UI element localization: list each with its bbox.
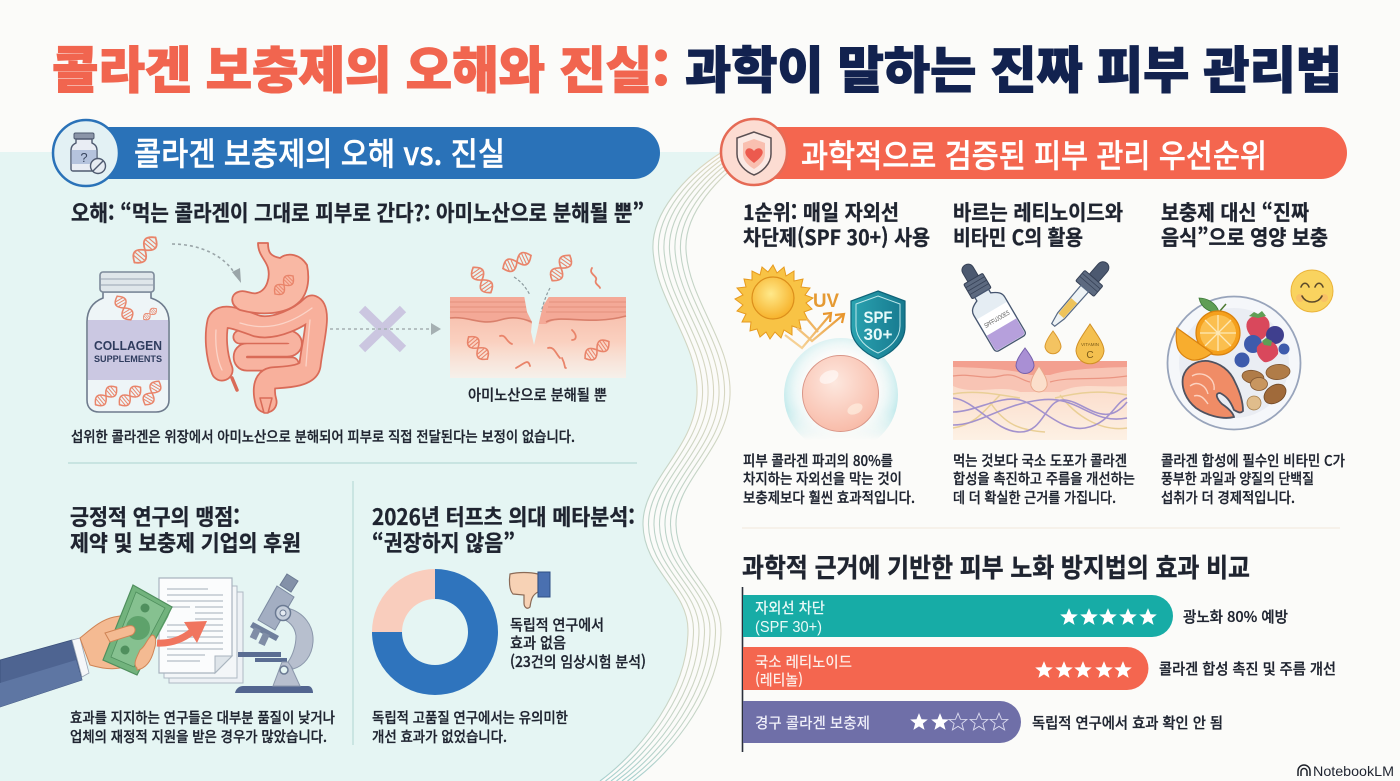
myth explanation text: 섭위한 콜라겐은 위장에서 아미노산으로 분해되어 피부로 직접 전달된다는 보정이 없습니다. [71, 426, 575, 447]
meta-analysis heading [372, 500, 635, 558]
bottle label text [94, 338, 162, 365]
real food heading: 보충제 대신 “진짜 [1161, 197, 1309, 227]
column: real food [1161, 197, 1345, 508]
rating: two of five stars [910, 713, 1008, 730]
funding bias heading [70, 500, 301, 558]
sunscreen explanation: 차지하는 자외선을 막는 것이 [743, 468, 902, 489]
bar: oral collagen [743, 701, 1021, 743]
bar label: sunscreen: (SPF 30+) [755, 619, 822, 636]
retinoid explanation: 합성을 촉진하고 주름을 개선하는 [953, 468, 1135, 489]
icon: supplement bottle with question mark: ? [80, 150, 88, 165]
illustration: serum droppers over skin layers: SPFFUJOOES [983, 309, 1011, 330]
no-effect label: 독립적 연구에서 [510, 614, 604, 635]
sunscreen heading: 차단제(SPF 30+) 사용 [743, 222, 930, 252]
left section header text: 콜라겐 보충제의 오해 vs. 진실 [134, 129, 505, 175]
left section header [53, 120, 660, 186]
illustration: stomach and intestines [216, 243, 316, 413]
rating: five stars [1035, 661, 1132, 678]
meta-analysis heading: “권장하지 않음” [372, 526, 515, 558]
meta-analysis explanation: 독립적 고품질 연구에서는 유의미한 [372, 707, 568, 728]
sunscreen heading [743, 197, 930, 252]
bar: sunscreen [743, 595, 1173, 637]
bar label: retinoid [755, 651, 852, 690]
retinoid explanation [953, 450, 1135, 508]
bar label: oral collagen: 경구 콜라겐 보충제 [755, 712, 870, 733]
illustration: collagen bottle [87, 233, 169, 412]
NotebookLM badge: NotebookLM [1313, 763, 1394, 779]
column: retinoid and vitamin C [949, 197, 1135, 508]
icon: smiling face [1291, 270, 1333, 312]
bar label: retinoid: (레티놀) [755, 669, 803, 690]
bar label: sunscreen [755, 597, 825, 636]
illustration: hand holding money [0, 585, 172, 707]
microscope [235, 686, 313, 693]
illustration: sun, UV and SPF shield [735, 265, 905, 452]
result: oral collagen: 독립적 연구에서 효과 확인 안 됨 [1032, 712, 1223, 733]
no-effect label: (23건의 임상시험 분석) [510, 651, 646, 672]
illustration: serum droppers over skin layers: VITAMIN [1081, 342, 1099, 347]
comparison chart [742, 548, 1336, 752]
panel: science-backed priorities (right) [721, 119, 1347, 752]
sunscreen explanation: 보충제보다 훨씬 효과적입니다. [743, 487, 915, 508]
retinoid explanation: 먹는 것보다 국소 도포가 콜라겐 [953, 450, 1127, 471]
no-effect label [510, 614, 646, 672]
funding bias heading: 긍정적 연구의 맹점: [70, 500, 240, 532]
real food heading [1161, 197, 1328, 252]
right section header [721, 119, 1347, 185]
cross mark and blocked arrow [330, 309, 441, 349]
title [52, 31, 1342, 103]
meta-analysis explanation: 개선 효과가 없었습니다. [372, 726, 507, 747]
icon: thumbs down [509, 572, 550, 608]
myth heading: 오해: “먹는 콜라겐이 그대로 피부로 간다?: 아미노산으로 분해될 뿐” [71, 196, 644, 228]
real food explanation [1161, 450, 1345, 508]
illustration: skin cross-section with amino acids [450, 250, 626, 378]
no-effect label: 효과 없음 [510, 632, 566, 653]
bar label: sunscreen: 자외선 차단 [755, 597, 825, 618]
sunscreen explanation: 피부 콜라겐 파괴의 80%를 [743, 450, 893, 471]
real food heading: 음식”으로 영양 보충 [1161, 222, 1328, 252]
result: sunscreen: 광노화 80% 예방 [1183, 606, 1288, 627]
real food explanation: 섭취가 더 경제적입니다. [1161, 487, 1295, 508]
real food explanation: 콜라겐 합성에 필수인 비타민 C가 [1161, 450, 1345, 471]
funding bias explanation [70, 707, 335, 747]
illustration: serum droppers over skin layers: C [1086, 350, 1094, 361]
illustration: papers and microscope [157, 574, 313, 693]
result: retinoid: 콜라겐 합성 촉진 및 주름 개선 [1159, 658, 1336, 679]
funding bias explanation: 업체의 재정적 지원을 받은 경우가 많았습니다. [70, 726, 327, 747]
illustration: sun, UV and SPF shield: SPF [864, 308, 892, 327]
title: 과학이 말하는 진짜 피부 관리법 [685, 31, 1342, 103]
donut chart: 75% no effect [372, 569, 498, 695]
panel: myth vs truth (left) [0, 120, 660, 747]
background: left teal panel [0, 152, 722, 781]
caption: broken into amino acids: 아미노산으로 분해될 뿐 [468, 384, 607, 405]
illustration: sun, UV and SPF shield: UV [813, 291, 839, 312]
retinoid explanation: 데 더 확실한 근거를 가집니다. [953, 487, 1116, 508]
block: Tufts meta-analysis [372, 500, 646, 747]
retinoid heading [953, 197, 1123, 252]
illustration: serum droppers over skin layers [949, 255, 1127, 440]
meta-analysis explanation [372, 707, 568, 747]
illustration: plate of fruit, salmon and nuts [1168, 296, 1300, 430]
bottle label text: COLLAGEN [94, 338, 162, 353]
sunscreen heading: 1순위: 매일 자외선 [743, 197, 899, 227]
decorative wave band [600, 152, 755, 781]
illustration: sun, UV and SPF shield: 30+ [864, 325, 893, 344]
icon: shield with heart [737, 132, 771, 175]
column: sunscreen [735, 197, 930, 508]
bar: retinoid [743, 647, 1148, 690]
title: 콜라겐 보충제의 오해와 진실: [52, 31, 670, 103]
arrow: bottle to stomach [172, 244, 241, 283]
funding bias heading: 제약 및 보충제 기업의 후원 [70, 526, 301, 558]
funding bias explanation: 효과를 지지하는 연구들은 대부분 품질이 낮거나 [70, 707, 335, 728]
chart heading: 과학적 근거에 기반한 피부 노화 방지법의 효과 비교 [742, 548, 1250, 585]
right section header text: 과학적으로 검증된 피부 관리 우선순위 [801, 131, 1267, 177]
rating: five stars [1060, 608, 1157, 625]
meta-analysis heading: 2026년 터프츠 의대 메타분석: [372, 500, 635, 532]
bottle label text: SUPPLEMENTS [94, 354, 162, 365]
retinoid heading: 비타민 C의 활용 [953, 222, 1083, 252]
block: funding bias [0, 500, 335, 747]
sunscreen explanation [743, 450, 915, 508]
bar label: retinoid: 국소 레티노이드 [755, 651, 852, 672]
real food explanation: 풍부한 과일과 양질의 단백질 [1161, 468, 1314, 489]
retinoid heading: 바르는 레티노이드와 [953, 197, 1123, 227]
icon: supplement bottle with question mark [71, 133, 106, 174]
